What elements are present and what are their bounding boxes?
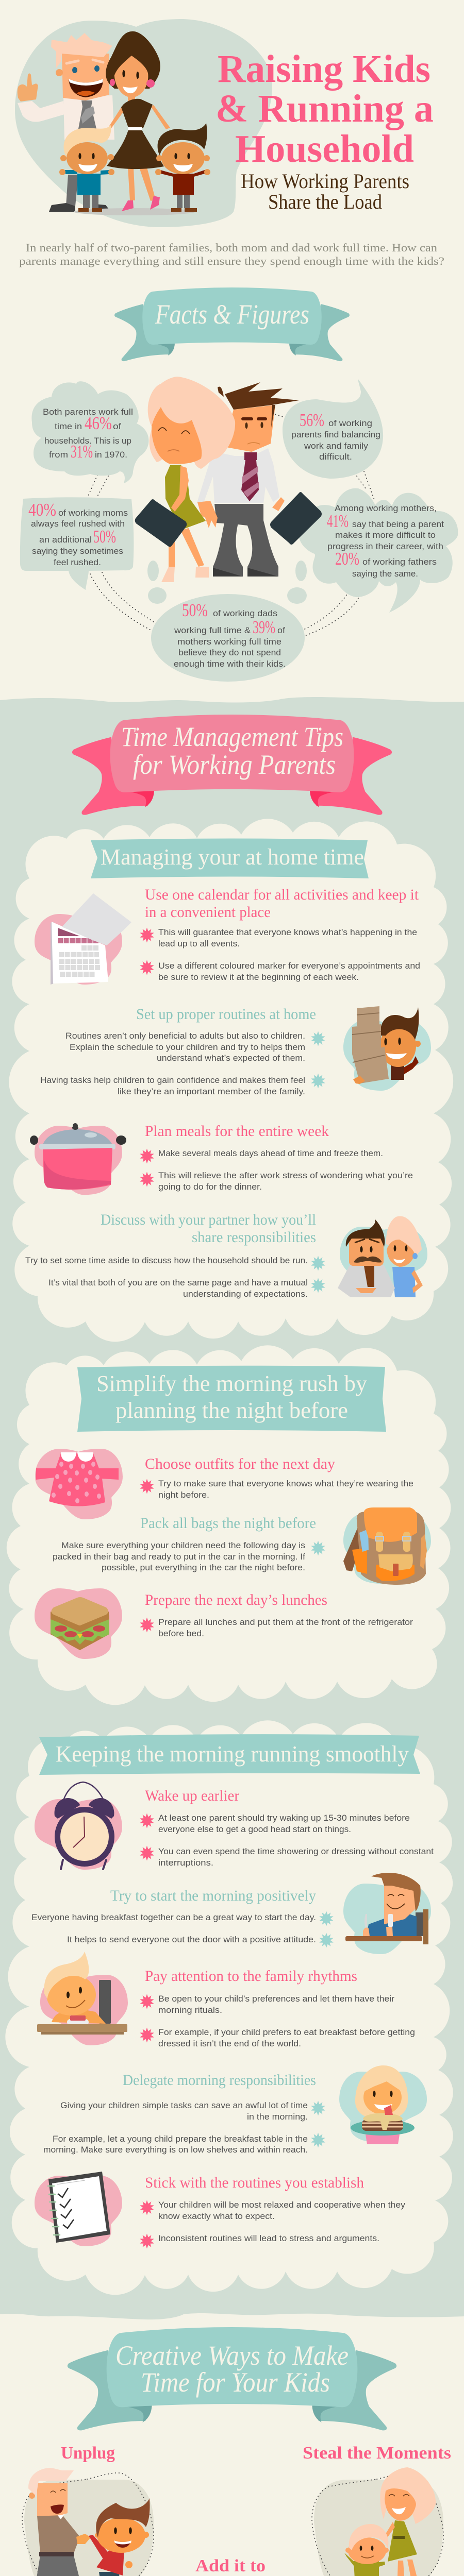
- subtitle: Share the Load: [268, 190, 382, 213]
- scalloped panel background: [5, 1720, 453, 2295]
- bullet: bags: Make sure everything your children need the following day is: [61, 1540, 305, 1550]
- bullet: wake earlier: everyone else to get a good head start on things.: [158, 1824, 351, 1834]
- tip heading: discuss: [101, 1211, 316, 1246]
- bullet: simple tasks: Giving your children simple tasks can save an awful lot of time: [60, 2100, 308, 2110]
- bullet: breakfast table: For example, let a young child prepare the breakfast table in the: [53, 2134, 308, 2144]
- bubble: both parents work full time: 46%: [85, 413, 112, 433]
- bubble: both parents work full time: [31, 381, 148, 483]
- bubble: among working mothers: Among working mothers,: [335, 503, 437, 513]
- bubble: both parents work full time: 31%: [71, 442, 93, 462]
- woman: [148, 377, 235, 582]
- tip heading: calendar: [145, 886, 419, 921]
- dotted connectors: [87, 414, 374, 636]
- bullet: tasks: like they’re an important member of the family.: [118, 1087, 305, 1096]
- bullet: same page: understanding of expectations.: [183, 1289, 308, 1299]
- bullet: routines: Routines aren’t only beneficial to adults but also to children.: [65, 1031, 305, 1041]
- illustration: grandpa playing with boy: [22, 2468, 154, 2576]
- bullet: inconsistent: [140, 2233, 379, 2248]
- box: 40% of working moms: [20, 497, 134, 590]
- tip heading: discuss: Discuss with your partner how you’ll: [101, 1211, 316, 1228]
- icon: calendar: [35, 893, 131, 985]
- title: Raising Kids: [218, 47, 430, 91]
- bullet: relieve stress: going to do for the dinner.: [158, 1182, 262, 1192]
- bullet: set time aside: [25, 1256, 325, 1270]
- bubble: 50% of working dads: [151, 594, 305, 682]
- bubble: 56% of working parents: difficult.: [319, 452, 352, 462]
- bubble: 56% of working parents: of working: [328, 418, 372, 428]
- bullet: preferences: [140, 1994, 394, 2015]
- icon: sandwich: [35, 1588, 122, 1659]
- bubble: among working mothers: 20%: [335, 549, 359, 569]
- bullet: lunches: Prepare all lunches and put them at the front of the refrigerator: [158, 1617, 413, 1627]
- bullet: breakfast before dressing: For example, if your child prefers to eat breakfast before getting: [158, 2027, 415, 2037]
- bullet: meals ahead: [140, 1148, 383, 1163]
- bullet: preferences: morning rituals.: [158, 2005, 222, 2015]
- bullet: relaxed: Your children will be most relaxed and cooperative when they: [158, 2200, 406, 2210]
- bubble: 50% of working dads: mothers working full time: [177, 637, 281, 647]
- intro text: In nearly half of two-parent families, both mom and dad work full time. How can: [26, 241, 437, 254]
- bullet: wake earlier: At least one parent should try waking up 15-30 minutes before: [158, 1813, 410, 1823]
- bubble: 56% of working parents: 56%: [300, 410, 324, 430]
- bullet: relieve stress: [140, 1171, 413, 1192]
- bullet: routines: understand what’s expected of them.: [157, 1053, 305, 1063]
- box: 40% of working moms: 50%: [93, 527, 116, 547]
- bubble: among working mothers: of working fathers: [362, 557, 437, 567]
- title: & Running a: [216, 87, 434, 130]
- decorative small blobs: [147, 561, 307, 604]
- scalloped panel background: [7, 1345, 451, 1705]
- bubble: among working mothers: [299, 488, 458, 613]
- icon: alarm clock: [35, 1782, 122, 1870]
- bubble: 50% of working dads: of: [277, 625, 285, 635]
- heading: Unplug: Unplug: [61, 2444, 115, 2463]
- icon: polka dot dress: [35, 1449, 123, 1519]
- icon: couple: [338, 1216, 427, 1297]
- panel: simplify the morning rush: [7, 1345, 451, 1705]
- panel: keeping the morning running smoothly: [5, 1720, 453, 2295]
- heading: Steal the Moments: Steal the Moments: [303, 2444, 451, 2463]
- icon: cooking pot: [30, 1123, 126, 1195]
- header illustration: family on heart: [15, 19, 272, 227]
- ribbon: Facts & Figures: [114, 287, 350, 361]
- section heading ribbon: Simplify the morning rush by: [96, 1371, 367, 1396]
- bubble: among working mothers: 41%: [327, 511, 349, 531]
- box: 40% of working moms: always feel rushed with: [31, 519, 125, 529]
- icon: backpack: [343, 1507, 431, 1585]
- ribbon: Creative Ways: Creative Ways to Make: [115, 2340, 349, 2371]
- tip heading: calendar: in a convenient place: [145, 904, 271, 921]
- bubble: 50% of working dads: 39%: [253, 617, 275, 637]
- bubble: 56% of working parents: [283, 379, 383, 479]
- bubble: among working mothers: progress in their career, with: [327, 541, 443, 551]
- bullet: guarantee: lead up to all events.: [158, 939, 240, 948]
- tip heading: discuss: share responsibilities: [192, 1229, 316, 1246]
- box: 40% of working moms: saying they sometimes: [32, 546, 123, 556]
- bullet: simple tasks: in the morning.: [247, 2112, 308, 2122]
- bullet: bags: possible, put everything in the car the night before.: [102, 1563, 305, 1572]
- bullet: breakfast: Everyone having breakfast together can be a great way to start the day.: [31, 1912, 316, 1922]
- ribbon: Facts & Figures: Facts & Figures: [155, 299, 309, 330]
- bullet: relaxed: [140, 2200, 406, 2221]
- bullet: outfits: night before.: [158, 1490, 209, 1500]
- bullet: relieve stress: This will relieve the after work stress of wondering what you’re: [158, 1171, 413, 1180]
- bullet: outfits: Try to make sure that everyone knows what they’re wearing the: [158, 1479, 413, 1488]
- bubble: both parents work full time: time in: [55, 421, 82, 431]
- bullet: showering: interruptions.: [158, 1858, 213, 1868]
- illustration: mom hugging child: [312, 2467, 443, 2576]
- title: [216, 47, 434, 171]
- icon: boy carrying boxes: [343, 1006, 431, 1091]
- man: [197, 382, 299, 577]
- title: Household: [235, 127, 414, 171]
- bubble: both parents work full time: households. This is up: [44, 436, 131, 446]
- bullet: breakfast table: [43, 2133, 325, 2155]
- bullet: coloured marker: be sure to review it at the beginning of each week.: [158, 972, 359, 982]
- subtitle: How Working Parents: [241, 170, 409, 193]
- box: 40% of working moms: an additional: [39, 535, 92, 545]
- section heading ribbon: [91, 839, 369, 878]
- bullet: coloured marker: Use a different coloured marker for everyone’s appointments and: [158, 961, 420, 971]
- bubble: 50% of working dads: enough time with their kids.: [174, 659, 286, 669]
- bullet: bags: [53, 1540, 325, 1572]
- scalloped panel background: [9, 819, 453, 1342]
- bullet: relaxed: know exactly what to expect.: [158, 2211, 275, 2221]
- bullet: tasks: [40, 1074, 325, 1096]
- bullet: positive attitude: It helps to send everyone out the door with a positive attitude.: [67, 1935, 316, 1944]
- section heading ribbon: Keeping the morning running smoothly: [56, 1741, 409, 1767]
- bubble: 50% of working dads: 50%: [182, 600, 208, 620]
- bullet: breakfast: [31, 1911, 334, 1926]
- bullet: showering: [140, 1845, 434, 1868]
- bullet: breakfast before dressing: dressed it isn’t the end of the world.: [158, 2039, 301, 2048]
- heading: Add it to the schedule: [182, 2556, 278, 2576]
- bullet: showering: You can even spend the time showering or dressing without constant: [158, 1846, 434, 1856]
- bullet: set time aside: Try to set some time aside to discuss how the household should be run.: [25, 1256, 308, 1265]
- tip heading: routines: Set up proper routines at home: [136, 1006, 316, 1023]
- tip heading: delegate: Delegate morning responsibilities: [123, 2072, 316, 2089]
- heart backdrop: [15, 19, 272, 227]
- bullet: guarantee: This will guarantee that everyone knows what’s happening in the: [158, 927, 417, 937]
- ribbon: Time Management Tips: for Working Parents: [133, 749, 336, 780]
- subtitle: [241, 170, 409, 213]
- box: 40% of working moms: 40%: [28, 500, 56, 520]
- tip heading: lunches: Prepare the next day’s lunches: [145, 1591, 327, 1608]
- bubble: 50% of working dads: of working dads: [213, 608, 277, 618]
- tip heading: bags: Pack all bags the night before: [140, 1515, 316, 1532]
- bubble: 50% of working dads: working full time &: [174, 625, 251, 635]
- bullet: same page: It’s vital that both of you are on the same page and have a mutual: [48, 1278, 308, 1287]
- section heading ribbon: [77, 1366, 386, 1432]
- bubble: 56% of working parents: work and family: [304, 441, 369, 451]
- tip heading: calendar: Use one calendar for all activities and keep it: [145, 886, 419, 903]
- bubble: 50% of working dads: believe they do not spend: [178, 648, 281, 657]
- bullet: breakfast before dressing: [140, 2027, 415, 2048]
- panel: managing your at home time: [9, 819, 453, 1342]
- bubble: among working mothers: makes it more difficult to: [335, 530, 436, 540]
- bullet: routines: Explain the schedule to your children and try to helps them: [70, 1042, 305, 1052]
- intro text: [19, 241, 444, 267]
- bullet: preferences: Be open to your child’s preferences and let them have their: [158, 1994, 394, 2004]
- bullet: same page: [48, 1278, 325, 1299]
- section heading ribbon: [39, 1734, 420, 1775]
- illustration: stressed working parents: [135, 377, 322, 582]
- ribbon: Creative Ways: Time for Your Kids: [141, 2367, 330, 2398]
- bullet: meals ahead: Make several meals days ahead of time and freeze them.: [158, 1148, 383, 1158]
- bullet: breakfast table: morning. Make sure everything is on low shelves and within reach.: [43, 2145, 308, 2155]
- ribbon: Time Management Tips: Time Management Tips: [121, 721, 343, 752]
- bubble: both parents work full time: from: [49, 450, 68, 460]
- bullet: lunches: [140, 1617, 413, 1638]
- heading: Add it to the schedule: Add it to: [195, 2556, 266, 2575]
- bullet: guarantee: [140, 927, 417, 948]
- section heading ribbon: Managing your at home time: [101, 844, 364, 870]
- section heading ribbon: planning the night before: [115, 1398, 348, 1423]
- bullet: routines: [65, 1031, 325, 1063]
- bullet: outfits: [140, 1479, 413, 1500]
- mom and two boys: [59, 31, 210, 215]
- bubble: both parents work full time: Both parents work full: [43, 407, 133, 417]
- bullet: wake earlier: [140, 1813, 410, 1834]
- tip heading: stick with routines: Stick with the routines you establish: [145, 2174, 364, 2191]
- bullet: tasks: Having tasks help children to gain confidence and makes them feel: [40, 1075, 305, 1085]
- tip heading: rhythms: Pay attention to the family rhythms: [145, 1968, 357, 1985]
- bubble: both parents work full time: in 1970.: [95, 450, 127, 460]
- bubble: among working mothers: say that being a parent: [352, 519, 444, 529]
- icon: girl with pancakes: [339, 2065, 427, 2144]
- bullet: positive attitude: [67, 1933, 334, 1947]
- briefcase left: [135, 499, 187, 547]
- bullet: bags: packed in their bag and ready to put in the car in the morning. If: [53, 1552, 305, 1562]
- tip heading: meals: Plan meals for the entire week: [145, 1123, 329, 1140]
- green band background: [0, 697, 464, 2319]
- icon: checklist: [35, 2172, 122, 2246]
- icon: boy eating at table: [37, 1952, 128, 2045]
- bullet: inconsistent: Inconsistent routines will lead to stress and arguments.: [158, 2233, 379, 2243]
- bubble: among working mothers: saying the same.: [352, 569, 418, 579]
- briefcase right: [270, 492, 322, 545]
- bullet: simple tasks: [60, 2100, 325, 2122]
- dad figure: [18, 33, 114, 212]
- ribbon: Time Management Tips: [72, 715, 392, 815]
- bubble: 56% of working parents: parents find balancing: [291, 430, 380, 439]
- icon: man at breakfast table: [343, 1873, 431, 1954]
- tip heading: wake up: Wake up earlier: [145, 1787, 239, 1804]
- box: 40% of working moms: of working moms: [58, 508, 128, 518]
- box: 40% of working moms: feel rushed.: [54, 557, 101, 567]
- bullet: coloured marker: [140, 960, 420, 982]
- intro text: parents manage everything and still ensure they spend enough time with the kids?: [19, 255, 444, 267]
- tip heading: outfits: Choose outfits for the next day: [145, 1455, 335, 1472]
- tip heading: positively: Try to start the morning positively: [110, 1887, 316, 1904]
- bullet: lunches: before bed.: [158, 1629, 204, 1638]
- ribbon: Creative Ways: [68, 2327, 396, 2430]
- bubble: both parents work full time: of: [113, 421, 121, 431]
